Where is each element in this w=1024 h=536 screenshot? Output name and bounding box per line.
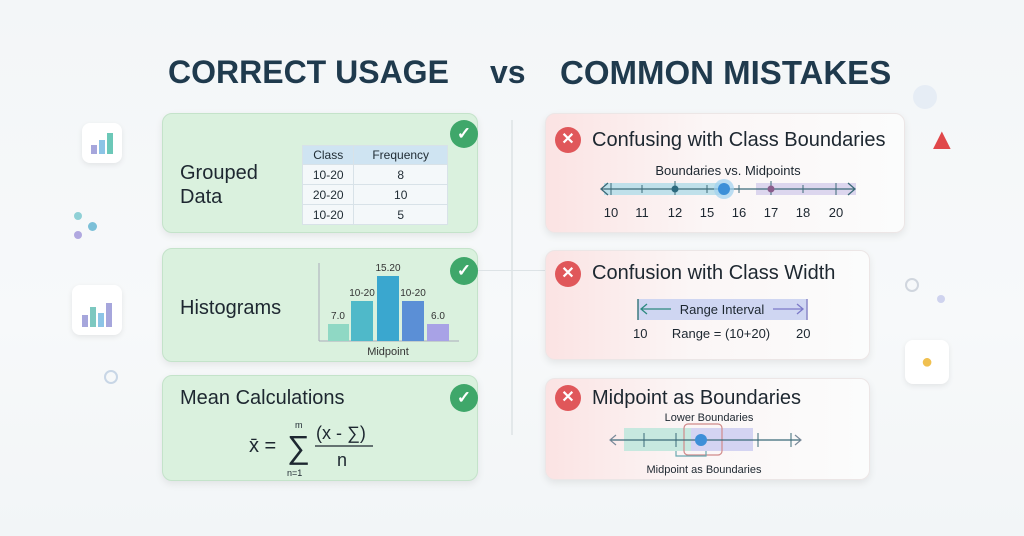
range diagram: 10	[633, 326, 647, 341]
range diagram: Range Interval	[680, 302, 764, 317]
table: Frequency	[372, 148, 429, 162]
number line: Boundaries vs. Midpoints	[655, 163, 801, 178]
boundary diagram	[609, 412, 802, 476]
number line: 10	[604, 205, 618, 220]
icon: check	[450, 120, 478, 148]
histogram chart: 10-20	[349, 288, 375, 299]
heading: histograms: Histograms	[180, 297, 281, 319]
icon: check: ✓	[457, 261, 471, 280]
divider line	[511, 120, 513, 435]
table: 10-20	[313, 168, 344, 182]
icon: x	[555, 261, 581, 287]
boundary diagram: Midpoint as Boundaries	[647, 464, 762, 476]
heading: grouped data: Data	[180, 186, 222, 208]
heading: Confusion with Class Width	[592, 262, 835, 284]
number line	[600, 163, 856, 220]
formula: (x - ∑)	[316, 423, 366, 443]
icon: x	[555, 127, 581, 153]
icon: x: ✕	[561, 131, 575, 148]
panel: confusing with class boundaries	[545, 113, 905, 233]
decorative right icons: ▲	[927, 123, 957, 156]
formula	[249, 420, 373, 478]
number line: 15	[700, 205, 714, 220]
histogram chart: 7.0	[331, 311, 345, 322]
number line: 20	[829, 205, 843, 220]
boundary diagram: Lower Boundaries	[665, 412, 754, 424]
heading: Confusing with Class Boundaries	[592, 129, 886, 151]
formula: x̄ =	[249, 435, 276, 457]
table: 10	[394, 188, 407, 202]
table: Class	[313, 148, 343, 162]
table: 10-20	[313, 208, 344, 222]
histogram chart: 15.20	[375, 263, 401, 274]
number line: 17	[764, 205, 778, 220]
formula: m	[295, 420, 302, 430]
panel: confusion with class width	[545, 250, 870, 360]
range diagram: 20	[796, 326, 810, 341]
icon: x	[555, 385, 581, 411]
connector lines	[478, 270, 545, 271]
number line: 12	[668, 205, 682, 220]
histogram chart: 10-20	[400, 288, 426, 299]
decorative left icons	[72, 123, 122, 384]
panel: histograms	[162, 248, 478, 362]
decorative right icons	[904, 85, 957, 386]
table: 5	[397, 208, 404, 222]
formula: n	[337, 450, 347, 470]
panel: grouped data	[162, 113, 478, 233]
panel: mean calculations	[162, 375, 478, 481]
icon: x: ✕	[561, 265, 575, 282]
heading: mean calculations: Mean Calculations	[180, 387, 345, 409]
heading: grouped data	[180, 162, 258, 208]
table: 20-20	[313, 188, 344, 202]
histogram chart: 6.0	[431, 311, 445, 322]
number line: 16	[732, 205, 746, 220]
heading: Midpoint as Boundaries	[592, 387, 801, 409]
icon: check: ✓	[457, 124, 471, 143]
table	[302, 145, 448, 225]
number line: 18	[796, 205, 810, 220]
icon: x: ✕	[561, 389, 575, 406]
title: CORRECT USAGE	[168, 54, 449, 90]
number line: 11	[635, 205, 649, 220]
histogram chart	[318, 263, 459, 358]
icon: check	[450, 257, 478, 285]
histogram chart: Midpoint	[367, 346, 409, 358]
formula: n=1	[287, 468, 302, 478]
range diagram: Range = (10+20)	[672, 326, 770, 341]
icon: check: ✓	[457, 388, 471, 407]
icon: check	[450, 384, 478, 412]
heading: grouped data: Grouped	[180, 162, 258, 184]
decorative right icons: ●	[921, 351, 933, 373]
title	[168, 54, 891, 91]
formula: ∑	[287, 429, 310, 465]
panel: midpoint as boundaries	[545, 378, 870, 480]
range diagram	[633, 299, 810, 341]
title: COMMON MISTAKES	[560, 54, 891, 91]
table: 8	[397, 168, 404, 182]
title: vs	[490, 54, 526, 90]
